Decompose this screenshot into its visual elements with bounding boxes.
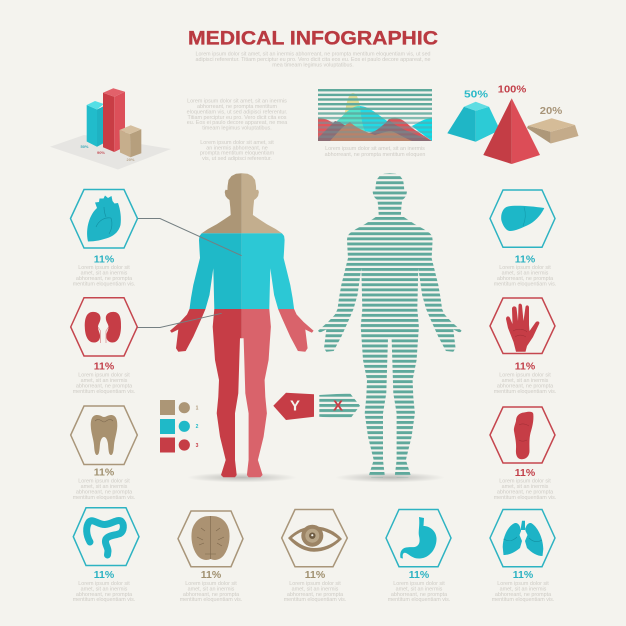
human body colored bbox=[165, 170, 318, 479]
description bbox=[180, 581, 242, 603]
description: abhorreant, ne prompta bbox=[76, 592, 132, 598]
icon: hand bbox=[506, 304, 539, 352]
description: mentitum eloquentiam vis. bbox=[73, 389, 135, 395]
middle text block: eloquentiam vis, ut sed adipisci referentur. bbox=[187, 109, 287, 115]
description: amet, sit an inermis bbox=[81, 586, 128, 592]
description: amet, sit an inermis bbox=[500, 586, 547, 592]
bar chart 3D: 50% bbox=[80, 144, 89, 149]
description bbox=[492, 581, 554, 603]
icon: intestine bbox=[87, 521, 123, 555]
description: abhorreant, ne prompta bbox=[183, 592, 239, 598]
panel: stomach bbox=[386, 510, 451, 603]
area chart with stripes bbox=[318, 89, 432, 141]
description: amet, sit an inermis bbox=[502, 484, 549, 490]
value: 11% bbox=[513, 569, 534, 581]
description: mentitum eloquentiam vis. bbox=[284, 597, 346, 603]
description: mentitum eloquentiam vis. bbox=[494, 282, 556, 288]
description: abhorreant, ne prompta bbox=[76, 276, 132, 282]
description: amet, sit an inermis bbox=[188, 586, 235, 592]
value: 11% bbox=[94, 569, 115, 581]
panel: intestine bbox=[73, 508, 139, 603]
middle text block: timeam legimus voluptatibus. bbox=[202, 126, 272, 132]
description: mentitum eloquentiam vis. bbox=[73, 597, 135, 603]
tan frustum bbox=[527, 118, 578, 144]
description bbox=[73, 478, 135, 501]
Y tag bbox=[273, 393, 314, 420]
description: amet, sit an inermis bbox=[502, 271, 549, 277]
description: Lorem ipsum dolor sit bbox=[499, 372, 551, 378]
legend: 3 bbox=[196, 443, 199, 449]
chart caption bbox=[325, 146, 425, 158]
intro text bbox=[196, 52, 430, 68]
description: amet, sit an inermis bbox=[81, 378, 128, 384]
icon: tooth bbox=[91, 415, 117, 455]
bar chart 3D: 90% bbox=[97, 150, 105, 155]
description: abhorreant, ne prompta bbox=[497, 276, 553, 282]
label 50: 50% bbox=[464, 90, 488, 100]
description: Lorem ipsum dolor sit bbox=[185, 581, 237, 587]
description bbox=[73, 581, 135, 603]
label 20: 20% bbox=[540, 106, 562, 117]
description: abhorreant, ne prompta bbox=[497, 384, 553, 390]
value: 11% bbox=[515, 467, 536, 479]
cyan frustum bbox=[447, 102, 500, 142]
panel: eye bbox=[282, 510, 347, 603]
shadow right body bbox=[335, 472, 445, 482]
description: mentitum eloquentiam vis. bbox=[494, 389, 556, 395]
middle text block: eu. Eos ei paulo decore appareat, ne mea bbox=[187, 120, 287, 126]
chart caption: abhorreant, ne prompta mentitum eloquen bbox=[325, 152, 425, 158]
panel: liver bbox=[490, 190, 556, 288]
description: amet, sit an inermis bbox=[81, 484, 128, 490]
intro text: adipisci referentur. Titiam perciptur eu pro. Vero dicit cita eos eu. Eos ei paulo decore appareat, ne bbox=[196, 57, 430, 63]
description: abhorreant, ne prompta bbox=[391, 592, 447, 598]
middle text block 2: vis, ut sed adipisci referentur. bbox=[202, 156, 272, 162]
description bbox=[284, 581, 346, 603]
description: amet, sit an inermis bbox=[502, 378, 549, 384]
panel: brain bbox=[178, 511, 243, 603]
middle text block 2: prompta mentitum eloquentiam bbox=[200, 151, 275, 157]
value: 11% bbox=[515, 254, 536, 266]
middle text block: Lorem ipsum dolor sit amet, sit an inermis bbox=[187, 98, 287, 104]
intro text: mea timeam legimus voluptatibus. bbox=[272, 62, 354, 68]
middle text block 2: Lorem ipsum dolor sit amet, sit bbox=[200, 140, 274, 146]
value: 11% bbox=[94, 360, 115, 372]
chart caption: Lorem ipsum dolor sit amet, sit an inermis bbox=[325, 146, 425, 152]
bar chart 3D bbox=[50, 88, 171, 170]
panel: heart bbox=[70, 190, 138, 288]
icon: eye bbox=[288, 525, 342, 552]
Y tag: Y bbox=[290, 398, 300, 414]
description: mentitum eloquentiam vis. bbox=[492, 597, 554, 603]
description: abhorreant, ne prompta bbox=[497, 489, 553, 495]
3D shapes bbox=[447, 84, 578, 164]
value: 11% bbox=[201, 569, 222, 581]
icon: brain bbox=[191, 516, 230, 560]
description: abhorreant, ne prompta bbox=[76, 489, 132, 495]
label 100: 100% bbox=[498, 84, 526, 96]
value: 11% bbox=[305, 569, 326, 581]
description: mentitum eloquentiam vis. bbox=[180, 597, 242, 603]
value: 11% bbox=[409, 569, 430, 581]
icon: foot bbox=[514, 412, 533, 459]
panel: lungs bbox=[490, 510, 555, 603]
description bbox=[494, 372, 556, 395]
shadow left body bbox=[187, 472, 297, 482]
legend: 2 bbox=[196, 424, 199, 430]
description: Lorem ipsum dolor sit bbox=[499, 265, 551, 271]
description: mentitum eloquentiam vis. bbox=[494, 495, 556, 501]
human body striped bbox=[315, 172, 465, 479]
description bbox=[494, 478, 556, 501]
icon: kidneys bbox=[85, 312, 121, 343]
description: abhorreant, ne prompta bbox=[495, 592, 551, 598]
panel: tooth bbox=[71, 406, 137, 501]
description: mentitum eloquentiam vis. bbox=[73, 495, 135, 501]
value: 11% bbox=[515, 360, 536, 372]
panel: foot bbox=[490, 407, 556, 501]
legend: 1 bbox=[196, 406, 199, 412]
description: abhorreant, ne prompta bbox=[287, 592, 343, 598]
description bbox=[73, 372, 135, 395]
description: mentitum eloquentiam vis. bbox=[73, 282, 135, 288]
panel: hand bbox=[490, 298, 556, 395]
description: amet, sit an inermis bbox=[396, 586, 443, 592]
middle text block: abhorreant, ne prompta mentitum bbox=[197, 104, 278, 110]
description: Lorem ipsum dolor sit bbox=[78, 372, 130, 378]
description: Lorem ipsum dolor sit bbox=[78, 581, 130, 587]
connector: heart bbox=[138, 218, 242, 256]
connector: kidneys bbox=[138, 313, 222, 328]
intro text: Lorem ipsum dolor sit amet, sit an inermis abhorreant, ne prompta mentitum eloquentiam vis, ut sed bbox=[196, 52, 430, 58]
icon: liver bbox=[501, 206, 544, 231]
description: Lorem ipsum dolor sit bbox=[497, 581, 549, 587]
icon: heart bbox=[87, 196, 121, 242]
title: MEDICAL INFOGRAPHIC bbox=[188, 28, 438, 50]
description bbox=[388, 581, 450, 603]
description: Lorem ipsum dolor sit bbox=[499, 478, 551, 484]
description: amet, sit an inermis bbox=[81, 271, 128, 277]
description bbox=[73, 265, 135, 288]
pyramid bbox=[483, 98, 540, 164]
icon: lungs bbox=[503, 521, 543, 556]
description bbox=[494, 265, 556, 288]
description: Lorem ipsum dolor sit bbox=[78, 478, 130, 484]
value: 11% bbox=[94, 466, 115, 478]
description: Lorem ipsum dolor sit bbox=[393, 581, 445, 587]
X tag bbox=[319, 393, 360, 419]
bar chart 3D: 20% bbox=[126, 157, 135, 162]
middle text block bbox=[187, 98, 287, 132]
legend bbox=[160, 400, 199, 452]
description: abhorreant, ne prompta bbox=[76, 384, 132, 390]
X tag: X bbox=[333, 398, 343, 414]
value: 11% bbox=[94, 254, 115, 266]
description: mentitum eloquentiam vis. bbox=[388, 597, 450, 603]
description: Lorem ipsum dolor sit bbox=[78, 265, 130, 271]
middle text block 2 bbox=[200, 140, 275, 162]
middle text block: Titiam perciptur eu pro. Vero dicit cita eos bbox=[188, 115, 287, 121]
description: Lorem ipsum dolor sit bbox=[289, 581, 341, 587]
icon: stomach bbox=[400, 517, 437, 559]
middle text block 2: an inermis abhorreant, ne bbox=[206, 145, 268, 151]
panel: kidneys bbox=[71, 298, 137, 395]
description: amet, sit an inermis bbox=[292, 586, 339, 592]
